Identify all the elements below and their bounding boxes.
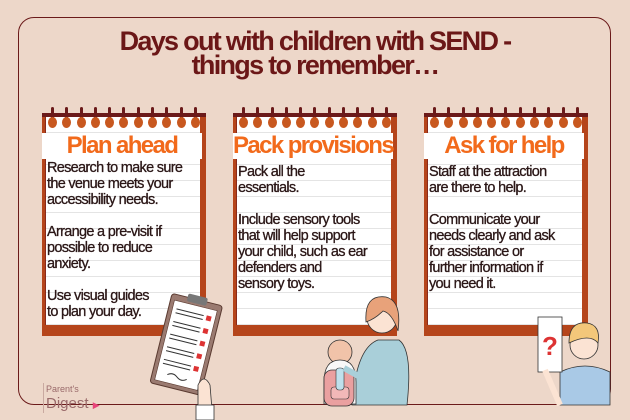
text: plan ahead: Use visual guides <box>47 288 149 304</box>
logo: Parent's Digest: Parent's <box>46 384 79 394</box>
panel: pack provisions <box>233 107 397 336</box>
text: pack provisions: sensory toys. <box>238 276 314 292</box>
text: plan ahead: Arrange a pre-visit if <box>47 224 161 240</box>
text: plan ahead: the venue meets your <box>47 176 172 192</box>
text: plan ahead: Research to make sure <box>47 160 182 176</box>
text: pack provisions: that will help support <box>238 228 355 244</box>
title <box>120 26 512 80</box>
heading: plan ahead <box>42 133 202 159</box>
panel: ask for help <box>424 107 588 336</box>
text: ask for help: Communicate your <box>429 212 540 228</box>
text: pack provisions: Include sensory tools <box>238 212 360 228</box>
text: plan ahead: accessibility needs. <box>47 192 158 208</box>
text: ask for help: Staff at the attraction <box>429 164 546 180</box>
text: ask for help: further information if <box>429 260 543 276</box>
text: ask for help: for assistance or <box>429 244 523 260</box>
text: ask for help <box>428 164 556 292</box>
text: ask for help: you need it. <box>429 276 496 292</box>
text: pack provisions: Pack all the <box>238 164 305 180</box>
text: pack provisions: essentials. <box>238 180 299 196</box>
heading: ask for help: Ask for help <box>444 132 564 159</box>
logo: Parent's Digest: Digest ▶ <box>46 395 100 412</box>
icon: mother and child with backpack <box>324 297 409 406</box>
text: pack provisions: your child, such as ear <box>238 244 367 260</box>
title: things to remember… <box>192 50 438 80</box>
text: plan ahead: to plan your day. <box>47 304 141 320</box>
heading: plan ahead: Plan ahead <box>67 132 177 159</box>
text: pack provisions <box>238 164 368 292</box>
text: ask for help: are there to help. <box>429 180 526 196</box>
text: pack provisions: defenders and <box>238 260 322 276</box>
icon: man holding question sign <box>538 317 610 405</box>
text: plan ahead: anxiety. <box>47 256 90 272</box>
text: plan ahead: possible to reduce <box>47 240 152 256</box>
text: ask for help: needs clearly and ask <box>429 228 555 244</box>
logo: Parent's Digest <box>43 383 100 413</box>
text: plan ahead <box>46 160 182 320</box>
heading: pack provisions: Pack provisions <box>233 132 393 159</box>
panel: plan ahead <box>42 107 206 336</box>
icon: clipboard with hand <box>150 289 224 420</box>
icon: man holding question sign: ? <box>542 331 558 361</box>
title: Days out with children with SEND - <box>120 26 510 56</box>
